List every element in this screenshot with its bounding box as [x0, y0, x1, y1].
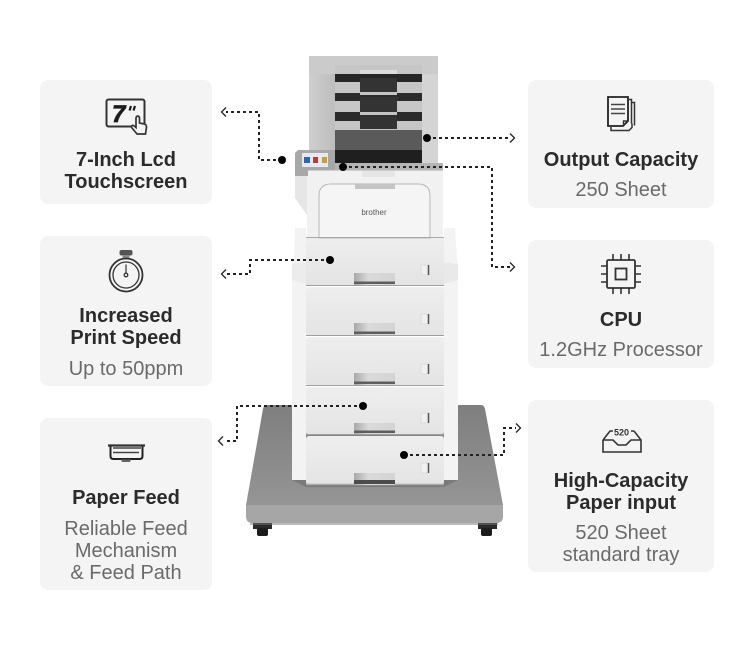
output mailbox unit: [309, 56, 443, 170]
touchscreen: [295, 150, 335, 176]
connector: paper feed: [218, 402, 367, 446]
panel: high-capacity paper input: [528, 400, 714, 572]
heading: Paper Feed: [72, 487, 180, 509]
panel: CPU: [528, 240, 714, 368]
heading: 7-Inch Lcd: [76, 149, 176, 171]
description: standard tray: [563, 544, 679, 566]
mobile stand: [246, 405, 503, 536]
description: Up to 50ppm: [69, 358, 183, 380]
brand name: brother: [361, 208, 387, 217]
printer on mobile stand: [246, 56, 503, 536]
icon: paper feed: [108, 444, 145, 462]
description: 520 Sheet: [575, 522, 667, 544]
connector: print speed: [222, 256, 334, 278]
icon: stopwatch: [108, 250, 144, 292]
heading: [70, 305, 182, 349]
description: Reliable Feed: [64, 518, 188, 540]
connector: output capacity: [423, 134, 514, 142]
heading: Increased: [79, 305, 173, 327]
side column: [292, 228, 306, 480]
heading: Print Speed: [70, 327, 182, 349]
description: [64, 518, 188, 584]
description: 1.2GHz Processor: [539, 339, 703, 361]
icon: chip: [601, 254, 641, 294]
icon: 520 tray: [602, 428, 642, 453]
panel: paper feed: [40, 418, 212, 590]
heading: Paper input: [566, 492, 676, 514]
icon: 520 tray: 520: [614, 428, 629, 438]
heading: Touchscreen: [64, 171, 188, 193]
description: & Feed Path: [70, 562, 182, 584]
connector: touchscreen: [222, 108, 286, 164]
heading: Output Capacity: [544, 149, 698, 171]
panel: output capacity: [528, 80, 714, 208]
panel: increased print speed: [40, 236, 212, 386]
connector: CPU: [339, 163, 514, 272]
heading: High-Capacity: [554, 470, 688, 492]
printer body: [295, 170, 444, 238]
heading: [554, 470, 688, 514]
icon: paper stack: [607, 96, 636, 132]
heading: CPU: [600, 309, 642, 331]
connector: paper input: [400, 424, 520, 459]
icon: 7-inch touch: 7: [112, 101, 127, 128]
icon: 7-inch touch: [106, 98, 148, 135]
description: 250 Sheet: [575, 179, 667, 201]
panel: 7-inch touchscreen: [40, 80, 212, 204]
description: [563, 522, 680, 566]
heading: [64, 149, 188, 193]
paper trays: [306, 238, 444, 485]
description: Mechanism: [75, 540, 177, 562]
